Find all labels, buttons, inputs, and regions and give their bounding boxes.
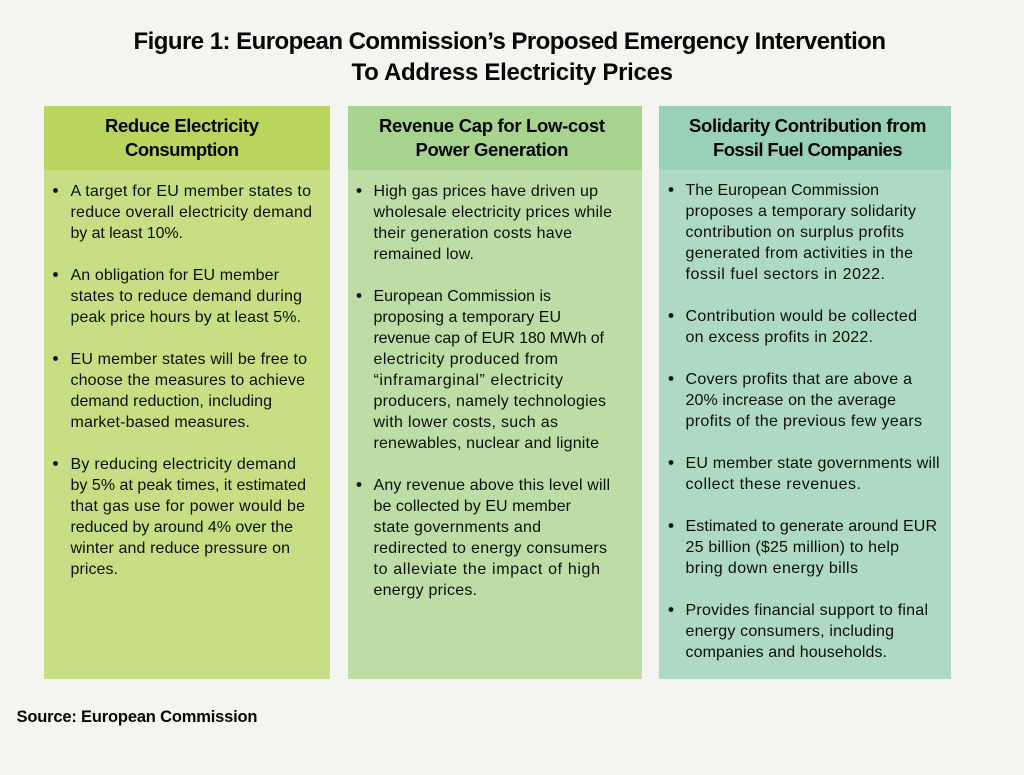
bullet: governments collect: EU member state governments will [686,455,940,472]
bullet: revenue redirected [357,477,610,599]
bullet: proposed cap [357,288,606,452]
bullet: covers profits [669,371,922,430]
bullet: covers profits: Covers profits that are above a [686,371,912,388]
bullet: high gas prices: their generation costs have [374,225,572,242]
panel header: Solidarity Contribution from [689,115,926,136]
bullet: peak times [53,456,306,578]
bullet: target: by at least 10%. [70,225,183,242]
bullet: revenue redirected: energy prices. [374,582,477,599]
bullet: estimated revenue: bring down energy bills [686,560,858,577]
bullet: proposed cap: European Commission is [374,288,551,305]
bullet: obligation: An obligation for EU member [70,267,280,284]
bullet: estimated revenue [669,518,937,577]
bullet: target: A target for EU member states to [70,183,311,200]
bullet: target [53,183,312,242]
bullet: obligation [53,267,302,326]
bullet: excess profits [669,308,917,346]
bullet: proposed cap: producers, namely technologies [374,393,606,410]
bullet: revenue redirected: be collected by EU member [374,498,572,515]
bullet: covers profits: 20% increase on the average [686,392,896,409]
bullet: proposed cap: proposing a temporary EU [374,309,561,326]
panel header [348,106,642,170]
title [134,28,886,86]
bullet: high gas prices: High gas prices have driven up [374,183,598,200]
bullet: governments collect: collect these revenues. [686,476,861,493]
bullet: temporary contribution: The European Commission [686,182,879,199]
bullet: high gas prices: remained low. [374,246,474,263]
bullet: peak times: By reducing electricity demand [70,456,296,473]
bullet: estimated revenue: Estimated to generate around EUR [686,518,937,535]
bullet: proposed cap: renewables, nuclear and lignite [374,435,599,452]
bullet: free to choose: demand reduction, including [70,393,272,410]
bullet: peak times: reduced by around 4% over the [70,519,293,536]
panel header: Consumption [125,139,239,160]
panel body [659,170,951,679]
panel header [659,106,951,170]
bullet: covers profits: profits of the previous few years [686,413,922,430]
bullet: financial support: companies and households. [686,644,887,661]
title: To Address Electricity Prices [352,59,673,86]
panel header: Power Generation [416,139,568,160]
panel header: Fossil Fuel Companies [713,139,902,160]
bullet: excess profits: on excess profits in 2022. [686,329,873,346]
bullet: obligation: states to reduce demand during [70,288,302,305]
bullet: revenue redirected: Any revenue above this level will [374,477,610,494]
bullet: peak times: by 5% at peak times, it estimated [70,477,306,494]
bullet: proposed cap: “inframarginal” electricity [374,372,563,389]
bullet: governments collect [669,455,940,493]
panel header: Revenue Cap for Low-cost [379,115,605,136]
bullet: financial support: energy consumers, including [686,623,894,640]
bullet: free to choose [53,351,307,431]
panel header [44,106,330,170]
panel body [44,170,330,679]
bullet: temporary contribution: contribution on surplus profits [686,224,904,241]
bullet: obligation: peak price hours by at least 5%. [70,309,301,326]
bullet: free to choose: EU member states will be free to [70,351,307,368]
bullet: free to choose: choose the measures to achieve [70,372,305,389]
bullet: high gas prices: wholesale electricity prices while [372,204,612,221]
bullet: high gas prices [357,183,612,263]
bullet: excess profits: Contribution would be collected [686,308,917,325]
bullet: free to choose: market-based measures. [70,414,250,431]
bullet: revenue redirected: redirected to energy consumers [374,540,607,557]
bullet: target: reduce overall electricity demand [70,204,312,221]
title: Figure 1: European Commission’s Proposed Emergency Intervention [134,28,886,55]
bullet: revenue redirected: to alleviate the impact of high [374,561,600,578]
bullet: temporary contribution: generated from activities in the [686,245,913,262]
bullet: proposed cap: revenue cap of EUR 180 MWh of [374,330,605,347]
bullet: proposed cap: with lower costs, such as [372,414,558,431]
bullet: peak times: winter and reduce pressure on [70,540,290,557]
bullet: temporary contribution [669,182,916,283]
panel body [348,170,642,679]
panel: revenue cap [348,106,642,679]
panel: solidarity contribution [659,106,951,679]
bullet: financial support: Provides financial support to final [686,602,928,619]
bullet: peak times: prices. [70,561,118,578]
panel header: Reduce Electricity [105,115,260,136]
bullet: temporary contribution: proposes a temporary solidarity [686,203,916,220]
bullet: proposed cap: electricity produced from [374,351,558,368]
source note: Source: European Commission [16,708,258,726]
panel: reduce electricity consumption [44,106,330,679]
bullet: temporary contribution: fossil fuel sectors in 2022. [686,266,885,283]
bullet: estimated revenue: 25 billion ($25 million) to help [686,539,899,556]
bullet: revenue redirected: state governments and [374,519,541,536]
bullet: peak times: that gas use for power would be [70,498,305,515]
bullet: financial support [669,602,928,661]
